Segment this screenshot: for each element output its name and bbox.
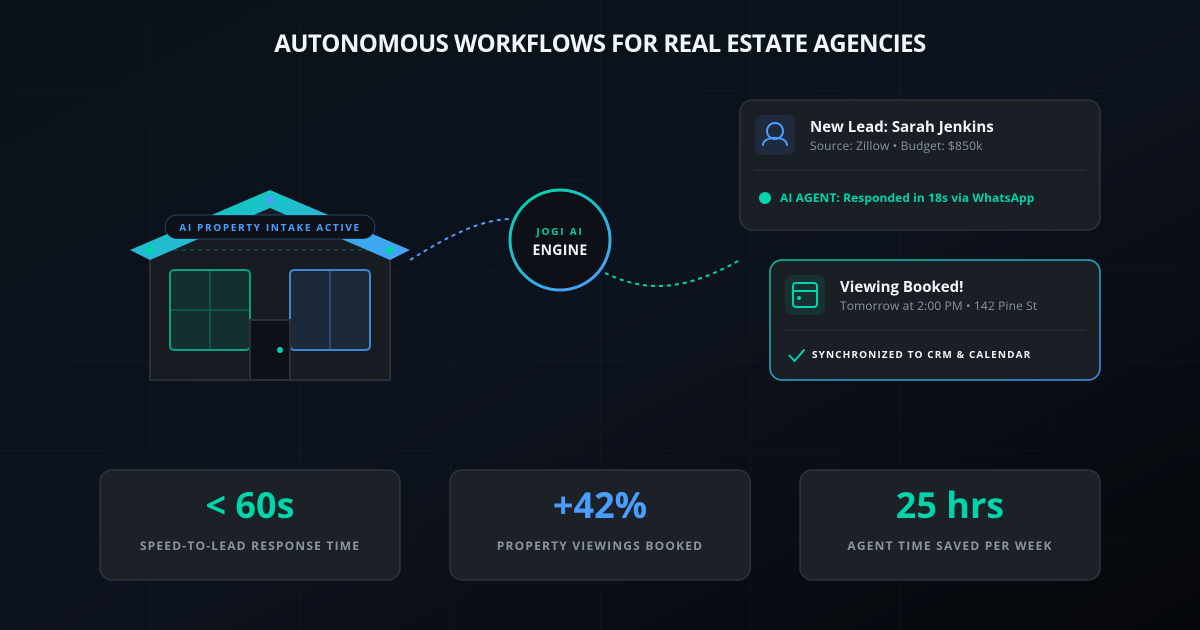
status dot	[759, 192, 771, 204]
stat value: < 60s	[206, 480, 294, 529]
left window	[170, 270, 250, 350]
booking details: Tomorrow at 2:00 PM • 142 Pine St	[840, 297, 1037, 314]
engine node	[508, 188, 612, 292]
stat value: +42%	[553, 480, 647, 529]
agent status: AI AGENT: Responded in 18s via WhatsApp	[780, 189, 1034, 206]
door	[250, 320, 290, 380]
engine name: ENGINE	[532, 241, 588, 260]
lead name: New Lead: Sarah Jenkins	[810, 117, 994, 137]
stat value: 25 hrs	[896, 480, 1004, 529]
card: viewing booked	[769, 259, 1101, 381]
status pill text: AI PROPERTY INTAKE ACTIVE	[179, 220, 361, 234]
roof nodes	[146, 196, 394, 254]
icon: calendar	[785, 275, 825, 315]
stat label: PROPERTY VIEWINGS BOOKED	[497, 537, 703, 554]
stat: response time	[99, 469, 401, 581]
stat label: AGENT TIME SAVED PER WEEK	[847, 537, 1053, 554]
pill shape	[165, 215, 375, 239]
lead details: Source: Zillow • Budget: $850k	[810, 137, 983, 154]
illustration: house	[130, 190, 410, 381]
icon: person	[755, 115, 795, 155]
stat: time saved	[799, 469, 1101, 581]
title: AUTONOMOUS WORKFLOWS FOR REAL ESTATE AGENCIES	[274, 27, 926, 60]
stat: viewings	[449, 469, 751, 581]
right window	[290, 270, 370, 350]
engine label: JOGI AI	[536, 224, 584, 238]
sync status: SYNCHRONIZED TO CRM & CALENDAR	[812, 347, 1031, 361]
icon: check	[789, 350, 804, 361]
roof	[130, 190, 410, 260]
roof dashed beam	[150, 249, 390, 251]
house body	[150, 202, 390, 380]
card: new lead	[739, 99, 1101, 231]
booking title: Viewing Booked!	[840, 277, 963, 297]
stat label: SPEED-TO-LEAD RESPONSE TIME	[140, 537, 360, 554]
